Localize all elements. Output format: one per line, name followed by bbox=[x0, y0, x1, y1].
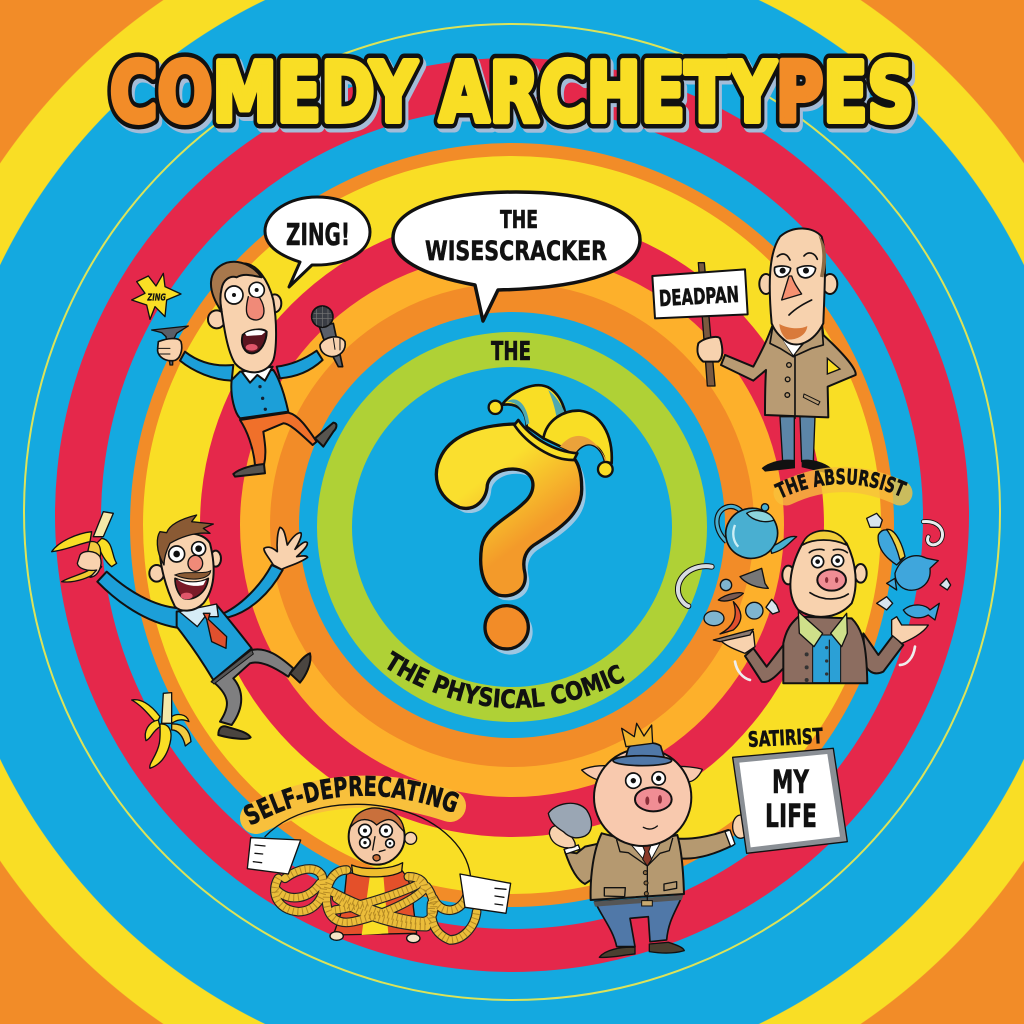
grey crescents and sparks bbox=[678, 522, 943, 680]
shoes bbox=[599, 942, 684, 957]
starburst zing bbox=[132, 273, 181, 319]
pig snout bbox=[817, 569, 846, 591]
goatee bbox=[779, 324, 807, 340]
mouth bbox=[810, 593, 848, 599]
curved label background bbox=[256, 792, 450, 818]
character: self-deprecating tangled in rope bbox=[247, 804, 511, 943]
shoes bbox=[218, 653, 311, 739]
left paper bbox=[247, 838, 301, 874]
shoes bbox=[233, 423, 336, 477]
brows bbox=[809, 549, 847, 553]
crown bbox=[622, 723, 653, 747]
mouth bbox=[643, 826, 657, 829]
suit bbox=[591, 833, 684, 900]
sign text: my life: LIFE bbox=[765, 797, 817, 835]
sweater bbox=[177, 605, 252, 680]
hands bbox=[549, 815, 749, 848]
nose bbox=[782, 276, 802, 300]
mouth bbox=[242, 329, 267, 353]
jacket and arms bbox=[745, 617, 903, 683]
mouth bbox=[373, 855, 380, 861]
legs bbox=[595, 897, 682, 947]
head bbox=[790, 532, 856, 617]
gadget bbox=[152, 326, 188, 365]
character: the absurdist juggler bbox=[678, 502, 951, 683]
head bbox=[349, 809, 405, 865]
tie bbox=[203, 613, 227, 648]
microphone bbox=[312, 306, 343, 367]
arms bbox=[97, 565, 283, 628]
pole bbox=[698, 263, 715, 386]
lapels and details bbox=[604, 838, 677, 900]
title: COMEDY ARCHETYPES bbox=[110, 46, 914, 141]
mustache bbox=[175, 571, 211, 579]
trousers bbox=[240, 413, 317, 465]
mouth bbox=[789, 300, 812, 315]
snout bbox=[635, 787, 672, 811]
label: the physical comic: THE PHYSICAL COMIC bbox=[387, 650, 625, 708]
ears bbox=[582, 766, 702, 782]
speech bubble: the wisecracker: THE bbox=[500, 205, 538, 234]
rope coils bbox=[275, 869, 477, 940]
left arm bbox=[565, 843, 600, 884]
legs bbox=[780, 417, 815, 462]
string arc bbox=[265, 804, 471, 877]
feet bbox=[330, 932, 420, 943]
ear bbox=[405, 832, 417, 844]
brows bbox=[777, 253, 817, 260]
hand bbox=[697, 337, 722, 362]
mouth bbox=[175, 578, 208, 599]
sign text: my life: MY bbox=[772, 763, 810, 801]
teapot bbox=[717, 502, 797, 564]
eyes bbox=[626, 772, 665, 788]
label: satirist: SATIRIST bbox=[747, 724, 824, 752]
rock bbox=[548, 803, 591, 838]
character: the physical comic with banana bbox=[52, 512, 311, 768]
sign text: deadpan: DEADPAN bbox=[658, 283, 740, 312]
buttons bbox=[805, 646, 828, 682]
head bbox=[594, 749, 691, 846]
ears bbox=[208, 294, 281, 328]
right hand bbox=[264, 527, 308, 569]
hat bbox=[613, 743, 672, 766]
ears bbox=[149, 551, 221, 582]
center question mark with jester hat bbox=[436, 385, 613, 655]
hands bbox=[158, 337, 345, 361]
blue fish and fan bbox=[867, 513, 951, 620]
ears bbox=[759, 274, 837, 294]
trousers bbox=[212, 649, 293, 725]
character: the wisecracker at microphone bbox=[132, 262, 345, 477]
head bbox=[160, 533, 214, 611]
hands bbox=[720, 617, 928, 653]
hair bbox=[802, 531, 847, 545]
hair bbox=[157, 515, 213, 565]
character: the satirist pig king with sign bbox=[548, 723, 847, 957]
turtleneck bbox=[352, 863, 403, 877]
starburst zing: ZING bbox=[147, 293, 166, 304]
head bbox=[770, 229, 825, 344]
speech bubble: the wisecracker bbox=[393, 192, 640, 321]
sign bbox=[652, 269, 748, 318]
character: the deadpan with sign bbox=[652, 229, 856, 473]
eyes bbox=[812, 555, 844, 568]
picture frame bbox=[733, 748, 847, 853]
curved label background bbox=[786, 480, 900, 493]
right paper bbox=[460, 874, 511, 913]
eyes bbox=[169, 542, 206, 562]
banana in hand bbox=[52, 512, 117, 582]
eyes bbox=[359, 824, 394, 848]
sign text: my life bbox=[765, 763, 817, 835]
label: THE: THE bbox=[491, 337, 531, 367]
label: the absursist: THE ABSURSIST bbox=[774, 468, 908, 498]
speech bubble: the wisecracker: WISESCRACKER bbox=[425, 236, 607, 267]
nose bbox=[246, 297, 264, 320]
label: self-deprecating: SELF-DEPRECATING bbox=[244, 776, 460, 824]
eyes bbox=[774, 266, 816, 278]
ears bbox=[782, 564, 867, 584]
coat bbox=[721, 322, 856, 417]
dropped banana peel bbox=[132, 693, 191, 768]
hair bbox=[211, 262, 262, 312]
cuffs bbox=[564, 830, 735, 854]
speech bubble: zing bbox=[265, 197, 370, 287]
shoes bbox=[762, 460, 833, 473]
nose bbox=[188, 555, 203, 571]
shirt bbox=[231, 370, 288, 418]
head bbox=[218, 263, 276, 372]
belt bbox=[593, 895, 683, 907]
eyes bbox=[225, 282, 264, 304]
left arm and right arm bbox=[180, 351, 323, 381]
speech bubble: zing: ZING! bbox=[286, 218, 350, 253]
flying objects bbox=[704, 568, 779, 642]
shirt and tie bbox=[630, 843, 660, 865]
sweater body bbox=[333, 870, 417, 935]
right arm bbox=[677, 830, 733, 859]
shirt bbox=[813, 635, 841, 683]
collar bbox=[798, 612, 847, 647]
shirt collar bbox=[179, 604, 218, 627]
